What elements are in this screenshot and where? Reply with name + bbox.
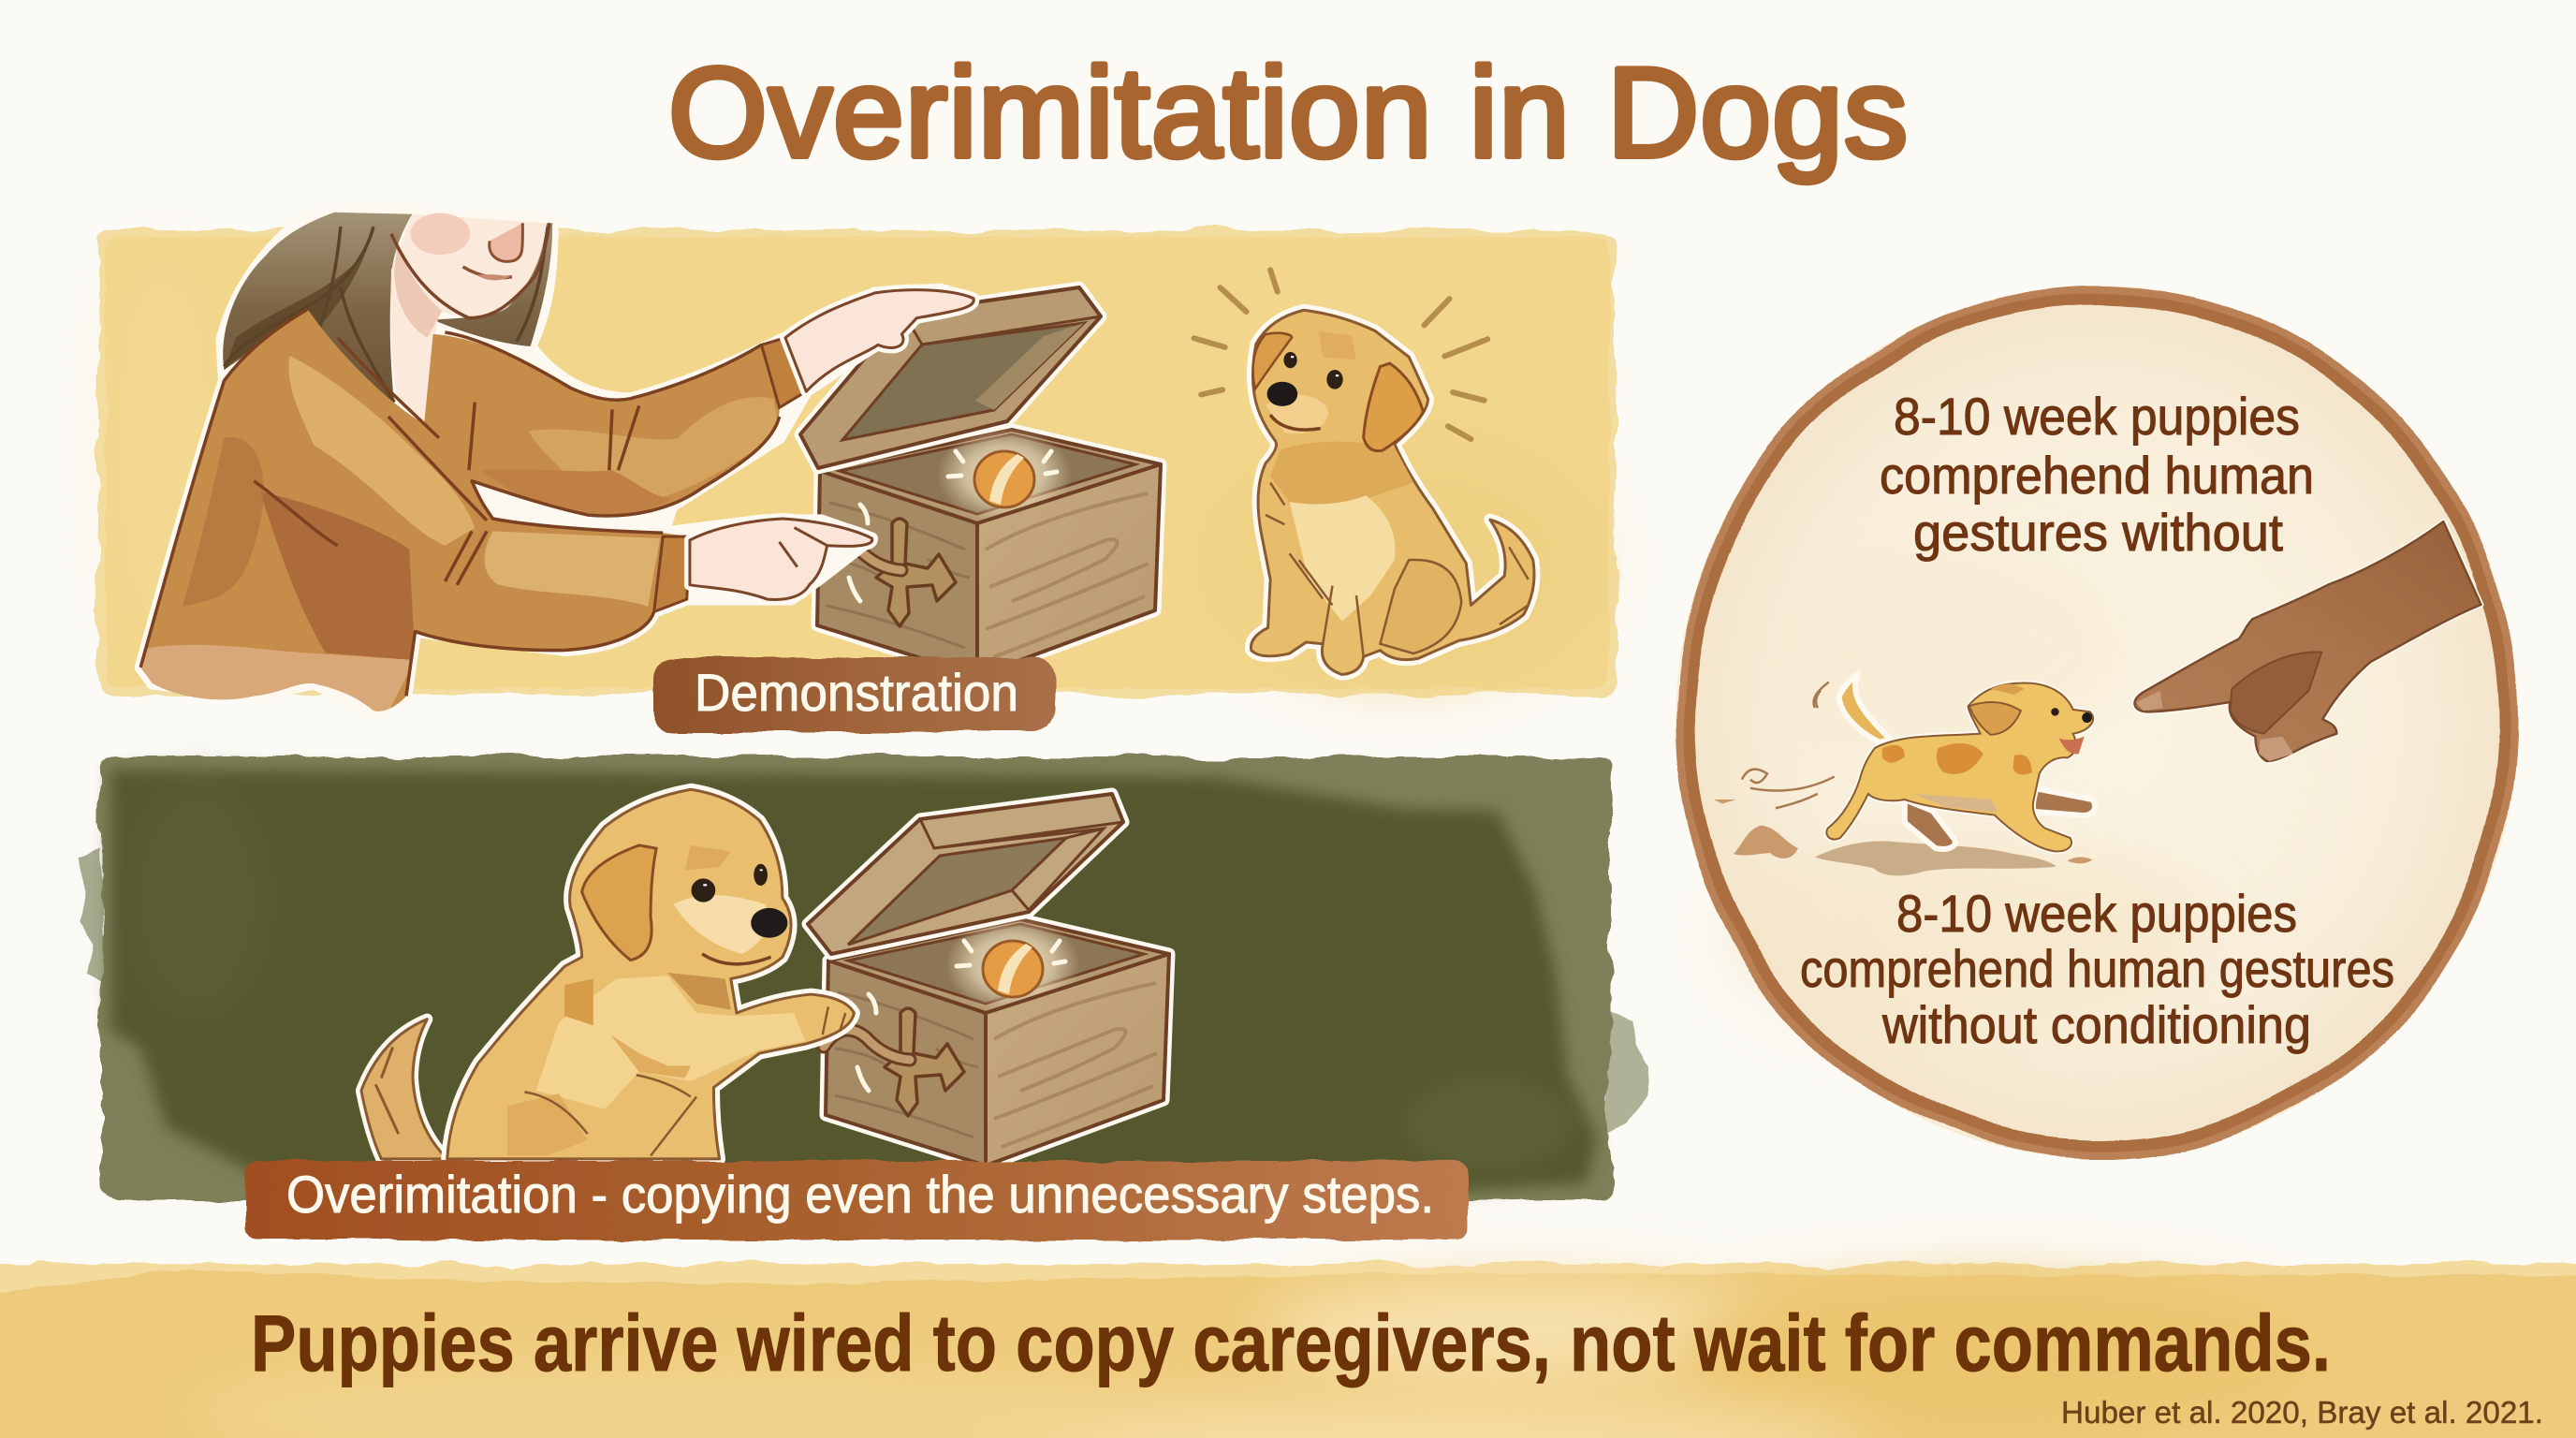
illustration: running puppy: [1714, 673, 2095, 875]
panel: demonstration background: [97, 230, 1616, 695]
lower hand: [690, 519, 872, 599]
circle text: top: [1880, 387, 2314, 562]
circle ring: [1679, 289, 2514, 1154]
title: Overimitation in Dogs: [668, 41, 1910, 183]
circle text: bottom: without conditioning: [1881, 995, 2311, 1054]
puppy body: [1251, 310, 1534, 674]
illustration: puppy copying: [361, 789, 854, 1159]
circle text: bottom: 8-10 week puppies: [1896, 884, 2297, 943]
label: overimitation caption: Overimitation - copying even the unnecessary steps.: [286, 1165, 1434, 1224]
body: [1826, 683, 2093, 851]
sleeve cuffs: [654, 338, 806, 611]
circle text: bottom: [1800, 884, 2394, 1054]
circle text: top: gestures without: [1913, 503, 2283, 562]
illustration: attentive sitting puppy: [1194, 270, 1534, 674]
illustration: woman demonstrating: [140, 213, 973, 717]
puppy body: [447, 789, 854, 1159]
puppy face: [692, 878, 715, 902]
puppy face: [1266, 395, 1328, 433]
circle text: top: comprehend human: [1880, 446, 2314, 505]
belly shade: [1913, 794, 1998, 813]
woman halo: [140, 213, 973, 711]
puppy attention rays: [1194, 270, 1487, 439]
illustration: pointing hand: [2134, 521, 2481, 761]
face and neck: [391, 214, 547, 424]
citation: Huber et al. 2020, Bray et al. 2021.: [2061, 1395, 2543, 1430]
label: demonstration: [653, 657, 1055, 732]
puppy ear: [582, 845, 656, 961]
panel: takeaway banner: [0, 1264, 2576, 1438]
puppy ear: [1364, 363, 1423, 451]
illustration: puzzle box in overimitation: [808, 794, 1169, 1166]
hair: [223, 213, 552, 405]
tail: [1839, 673, 1891, 742]
panel: overimitation background: [79, 756, 1649, 1200]
far legs: [1905, 788, 2095, 849]
ground shadow: [1815, 841, 2056, 875]
upper hand: [785, 290, 973, 391]
label: demonstration: Demonstration: [695, 663, 1018, 722]
puppy tail: [361, 1020, 447, 1159]
illustration: puzzle box in demonstration: [800, 287, 1161, 676]
sweater: [140, 309, 806, 712]
circle text: bottom: comprehend human gestures: [1800, 939, 2394, 998]
circle text: top: 8-10 week puppies: [1894, 387, 2300, 446]
panel: gesture comprehension circle: [1676, 286, 2518, 1158]
spots: [1882, 743, 2032, 774]
ear and face: [1969, 702, 2021, 735]
